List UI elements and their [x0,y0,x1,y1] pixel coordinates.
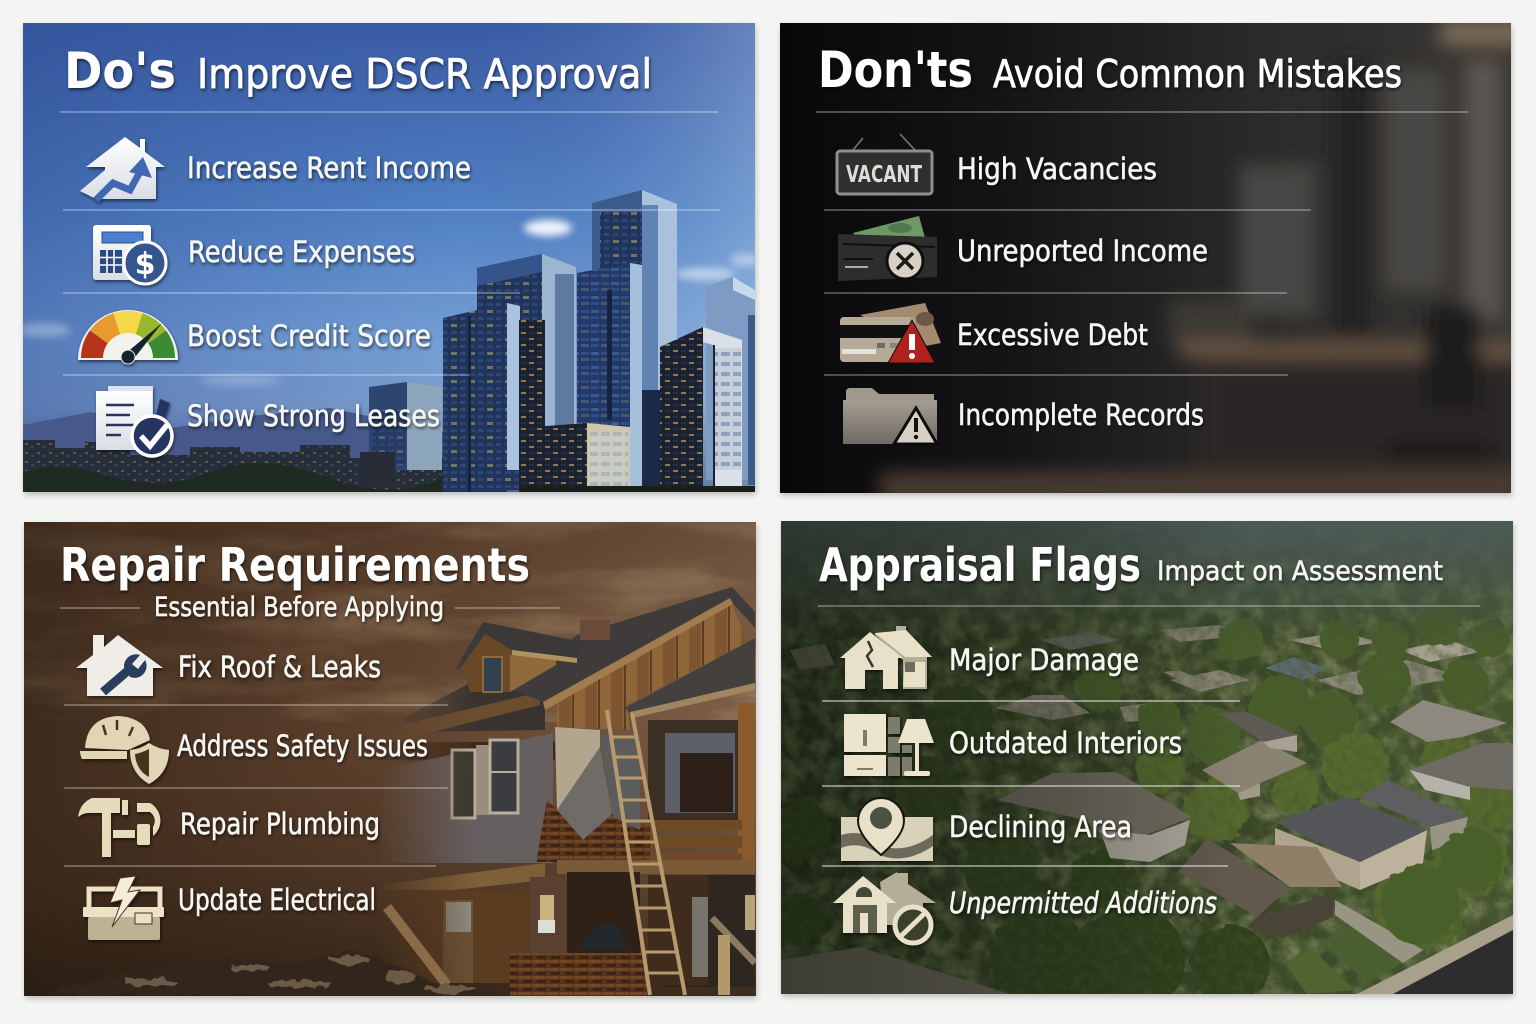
item: Incomplete Records: Incomplete Records [958,398,1204,432]
icon: credit gauge [78,310,178,364]
icon: hard hat and shield [80,716,169,784]
item: Show Strong Leases: Show Strong Leases [187,399,440,433]
houses [1202,740,1307,793]
chimney [580,620,610,640]
tower C [577,263,630,427]
icon: map pin [841,798,933,861]
panel: Appraisal Flags [770,521,1520,1015]
icon: vacant sign: VACANT [846,162,922,188]
tower E [660,327,703,492]
title: Do's: Do's [64,42,176,100]
tower B [477,254,542,490]
icon: house with rising arrow [80,137,165,200]
subtitle: Essential Before Applying: Essential Before Applying [154,592,444,623]
item: Fix Roof & Leaks: Fix Roof & Leaks [178,650,381,684]
title: Appraisal Flags: Appraisal Flags [819,538,1141,592]
item: Excessive Debt: Excessive Debt [957,318,1148,352]
background: house under repair [24,522,756,996]
icon: fridge, tiles and lamp [844,714,934,776]
lawns and road [1320,920,1403,982]
icon: calculator with dollar [93,225,166,284]
icon: hammer and pipe [78,798,160,857]
background: blurred dark office [780,20,1530,502]
icon: unpermitted house [833,872,936,943]
tower D [443,303,507,492]
icon: wallet with cash and X [838,216,937,281]
icon: calculator with dollar: $ [135,247,155,282]
item: Increase Rent Income: Increase Rent Income [187,151,471,185]
item: Major Damage: Major Damage [949,643,1139,677]
small tower [369,382,407,470]
subtitle: Avoid Common Mistakes: Avoid Common Mistakes [993,52,1402,96]
background: aerial neighborhood [770,521,1520,1015]
item: Update Electrical: Update Electrical [178,883,376,917]
trees [770,603,1520,1015]
house [380,587,755,996]
item: Unpermitted Additions: Unpermitted Additions [949,886,1217,920]
background: city skyline [19,23,760,500]
icon: vacant sign [837,134,932,194]
panel: Don'ts [780,20,1530,502]
icon: lease document with check [96,386,172,456]
ladder [607,710,685,995]
overlays [781,521,1513,646]
wall sections [555,727,600,810]
dormer [463,628,510,692]
item: High Vacancies: High Vacancies [957,152,1157,186]
panel: Repair Requirements [24,522,756,996]
far tower [706,277,755,480]
item: Unreported Income: Unreported Income [957,234,1208,268]
icon: toolbox with lightning bolt [83,876,164,940]
beams and lower floor [557,860,755,874]
icon: damaged house [840,626,932,689]
subtitle: Improve DSCR Approval: Improve DSCR Approval [197,50,652,98]
icon: house with wrench [76,635,163,696]
title: Don'ts: Don'ts [818,41,973,99]
item: Declining Area: Declining Area [949,810,1132,844]
item: Repair Plumbing: Repair Plumbing [180,807,380,841]
title: Repair Requirements: Repair Requirements [60,538,530,592]
icon: credit cards with warning [840,303,941,363]
tower A [592,190,642,490]
low block [545,423,587,486]
subtitle: Impact on Assessment: Impact on Assessment [1157,556,1443,587]
panel: Do's [19,23,760,500]
item: Boost Credit Score: Boost Credit Score [187,319,431,353]
foreground trees [1380,828,1504,945]
item: Outdated Interiors: Outdated Interiors [949,726,1182,760]
item: Reduce Expenses: Reduce Expenses [188,235,415,269]
item: Address Safety Issues: Address Safety Issues [177,729,428,763]
icon: folder with warning [843,388,937,444]
distant houses [790,625,1480,722]
